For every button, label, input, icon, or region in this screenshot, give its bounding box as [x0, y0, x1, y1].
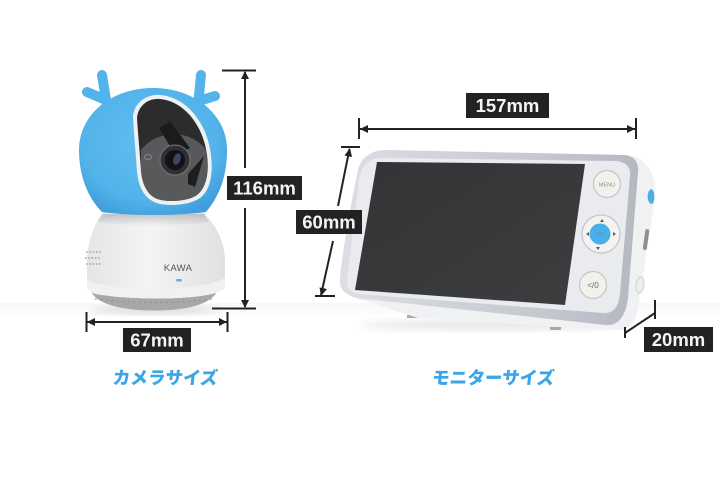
lens window rim	[133, 95, 212, 205]
dimension: camera height	[212, 70, 302, 308]
outer shell	[340, 150, 655, 330]
dimension: camera width	[86, 312, 228, 352]
dimension: monitor depth: 20mm	[652, 329, 705, 350]
speaker holes	[85, 252, 101, 264]
button: direction pad: OK	[596, 232, 604, 238]
button: back: </0	[587, 281, 599, 290]
dimension: camera height: 116mm	[233, 178, 296, 198]
button: menu: MENU	[599, 182, 615, 188]
camera illustration	[79, 75, 227, 313]
feet	[407, 315, 418, 318]
brand: KAWA	[164, 263, 193, 274]
button: direction pad	[582, 215, 620, 253]
camera head	[79, 88, 227, 215]
front grey frame	[340, 150, 638, 325]
camera base	[85, 212, 225, 310]
front panel	[347, 158, 630, 313]
dimension: monitor width: 157mm	[476, 95, 539, 116]
icon: left antler	[87, 75, 107, 106]
button: back	[580, 272, 606, 298]
screen	[355, 162, 585, 305]
side button: blue	[648, 189, 654, 204]
icon: right antler	[198, 75, 215, 106]
monitor illustration	[340, 150, 655, 330]
dimension: monitor height	[296, 147, 362, 296]
dimension: camera width: 67mm	[130, 330, 184, 350]
button: menu	[594, 170, 620, 198]
lens window	[137, 99, 208, 201]
dimension: monitor height: 60mm	[302, 212, 356, 232]
dimension: monitor width	[359, 93, 636, 139]
dimension: monitor depth	[625, 300, 713, 352]
side button: small	[635, 277, 645, 293]
lens	[160, 145, 190, 175]
caption: monitor size: モニターサイズ	[431, 367, 556, 388]
caption: camera size: カメラサイズ	[112, 367, 219, 388]
side port	[643, 229, 650, 250]
